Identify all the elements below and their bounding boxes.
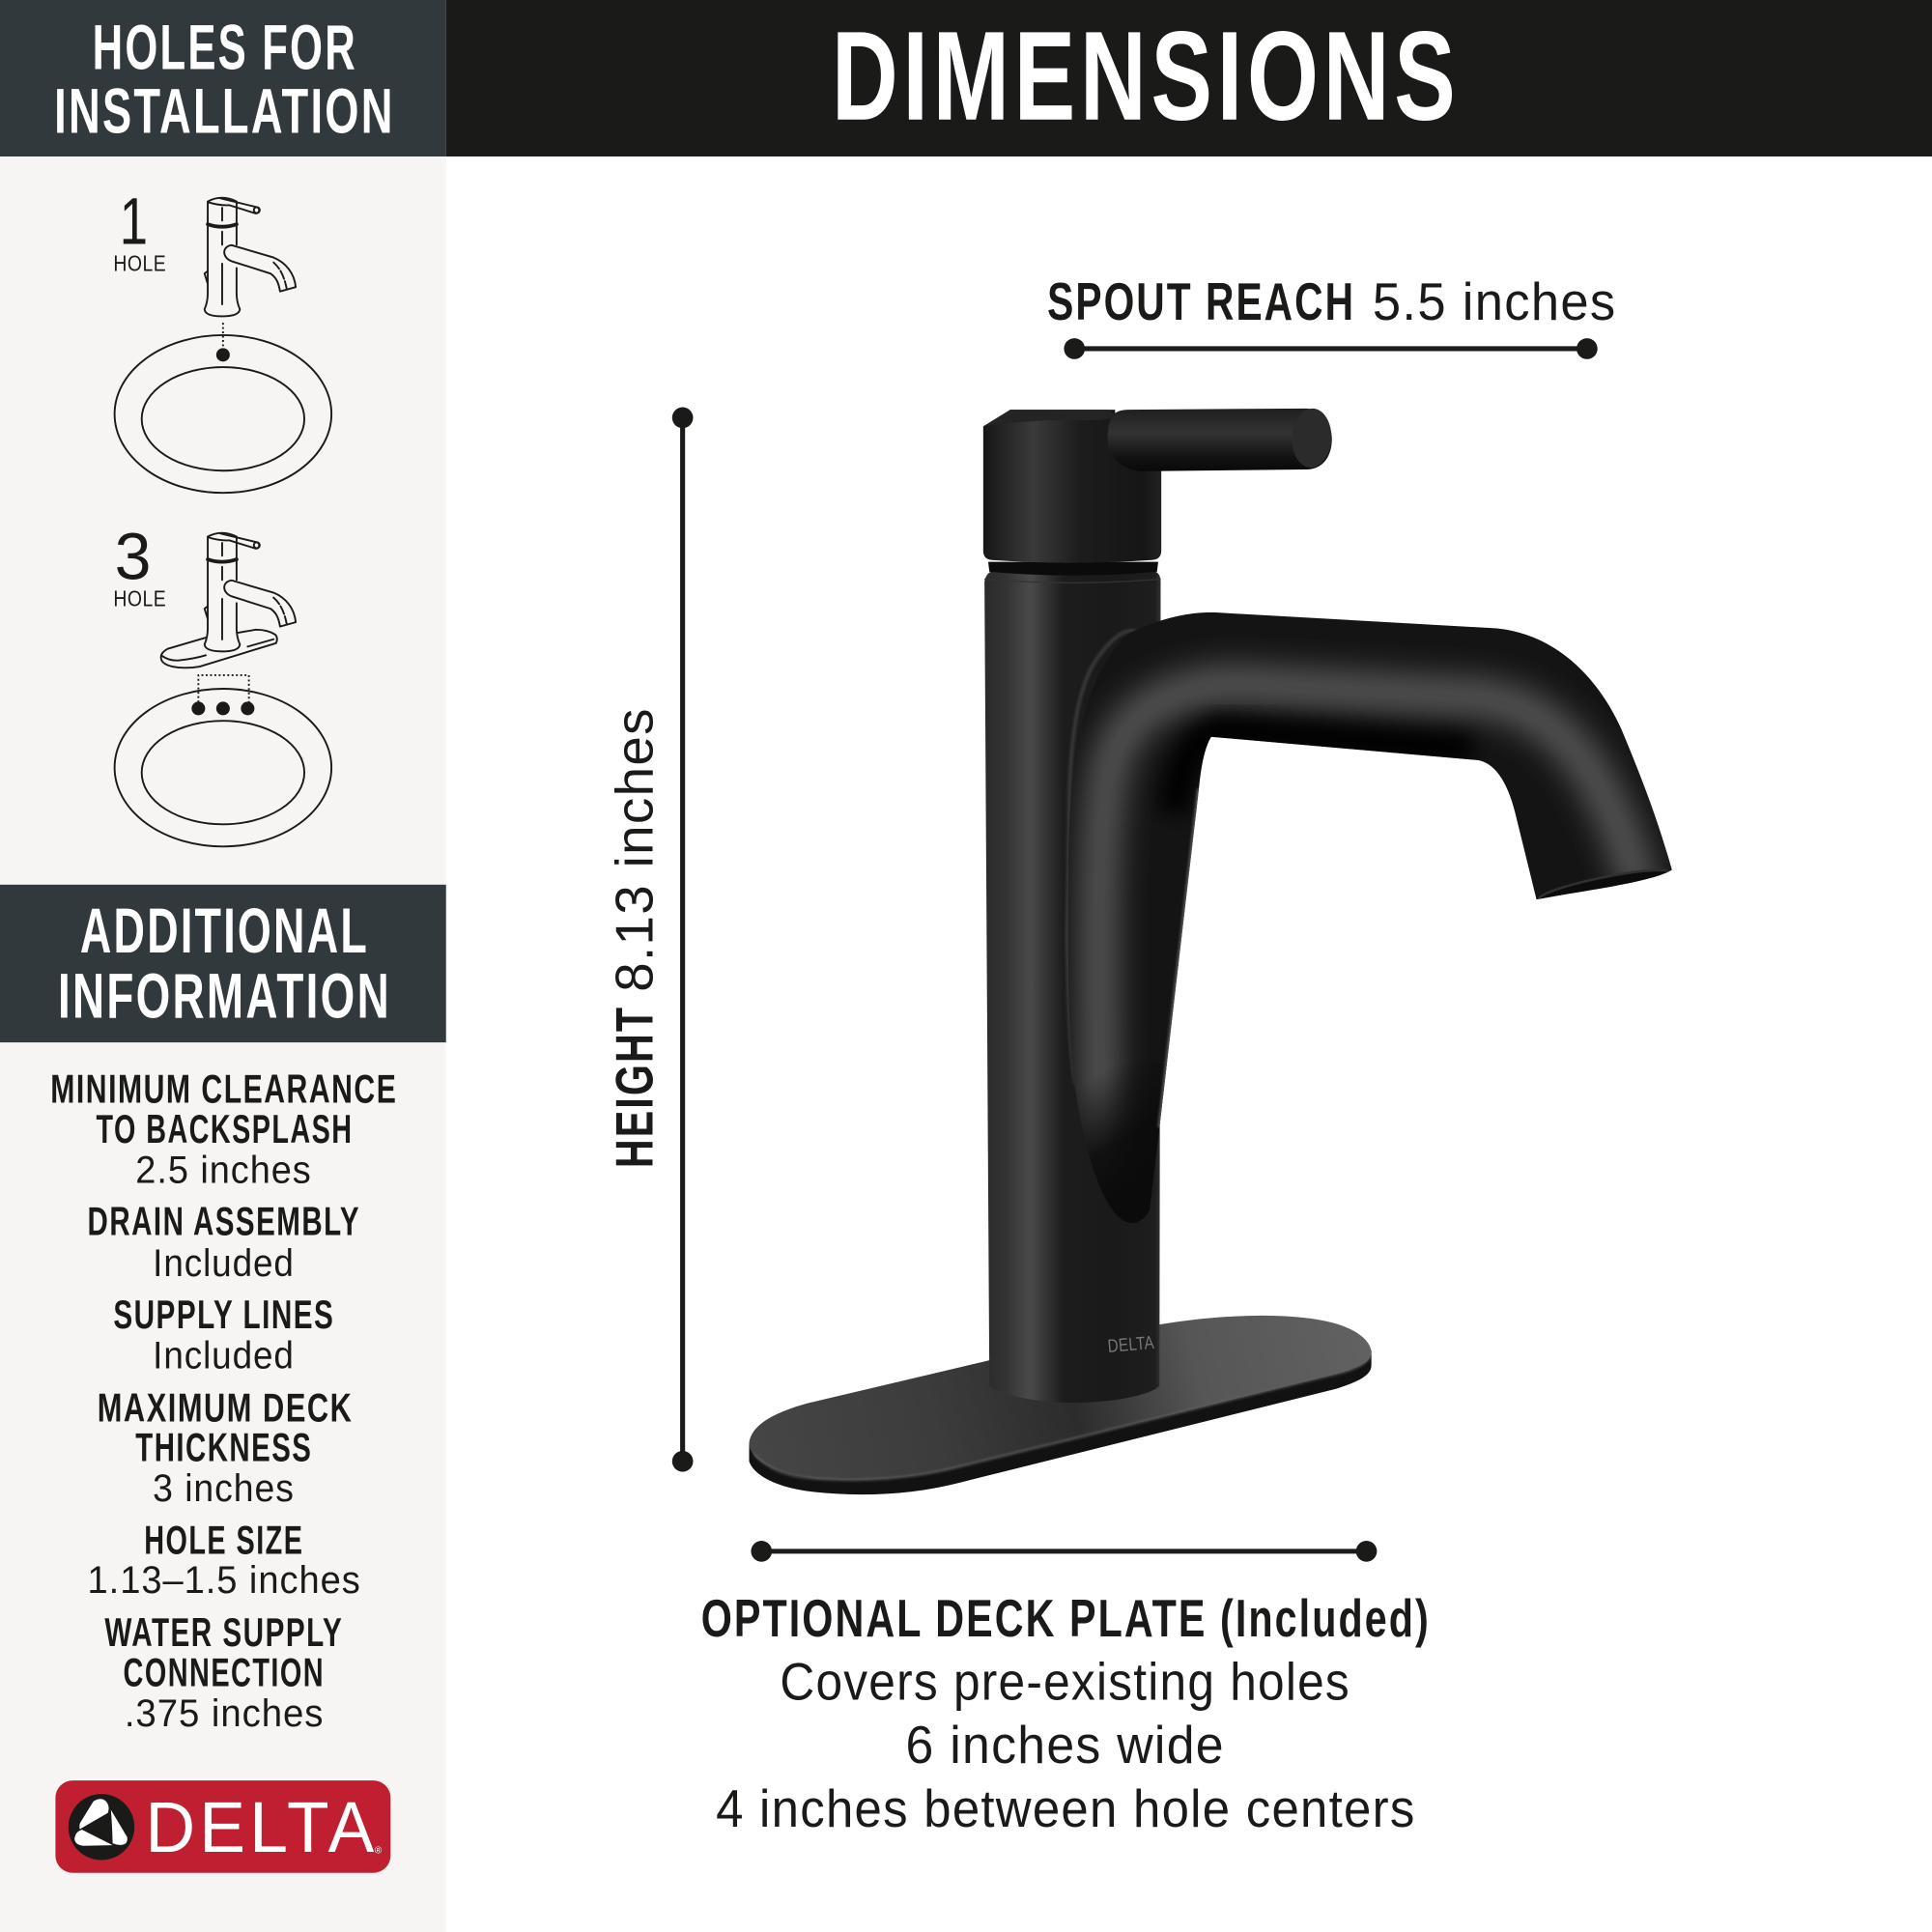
header: additional information: INFORMATION [58, 961, 391, 1033]
title: dimensions: DIMENSIONS [832, 5, 1460, 147]
text block: additional information list: MINIMUM CLEARANCE [50, 1066, 397, 1112]
dimension: spout reach: SPOUT REACH [1047, 271, 1355, 331]
dimension: height [604, 408, 693, 1472]
logo: delta: ® [375, 1845, 383, 1856]
handle lever [1108, 408, 1333, 471]
header: holes for installation: INSTALLATION [54, 76, 395, 148]
dimension: spout reach: 5.5 inches [1373, 271, 1616, 331]
text block: additional information list [50, 1066, 397, 1735]
text block: additional information list: WATER SUPPLY [104, 1609, 343, 1655]
text block: additional information list: SUPPLY LINES [113, 1292, 334, 1337]
dimension: height: HEIGHT [604, 1006, 664, 1168]
logo: delta: DELTA [146, 1787, 379, 1867]
text block: additional information list: THICKNESS [135, 1425, 312, 1470]
text block: optional deck plate: 6 inches wide [906, 1715, 1225, 1775]
text block: additional information list: 3 inches [153, 1467, 295, 1510]
panel: left sidebar background [0, 0, 446, 1932]
header: holes for installation: HOLES FOR [93, 12, 357, 83]
text block: additional information list: 1.13–1.5 inches [88, 1559, 361, 1602]
spout [1060, 604, 1688, 1233]
dimension: spout reach [1047, 271, 1616, 359]
header: holes for installation [0, 0, 446, 156]
dimension: height: 8.13 inches [604, 707, 664, 992]
title: dimensions [446, 0, 1932, 156]
text block: additional information list: TO BACKSPLASH [96, 1106, 353, 1151]
text block: additional information list: HOLE SIZE [144, 1517, 303, 1562]
ring [984, 562, 1161, 582]
text block: additional information list: 2.5 inches [135, 1149, 312, 1191]
header: additional information [0, 885, 446, 1042]
text block: additional information list: DRAIN ASSEMBLY [88, 1199, 360, 1244]
product: faucet [750, 408, 1688, 1494]
icon: 1 hole installation: 1 [120, 185, 149, 259]
dimension: deck plate width [751, 1541, 1377, 1562]
text block: additional information list: Included [153, 1242, 295, 1285]
text block: additional information list: .375 inches [125, 1692, 324, 1735]
icon: 3 hole installation: 3 [115, 519, 153, 593]
header: additional information: ADDITIONAL [80, 895, 369, 967]
handle body [983, 410, 1161, 563]
text block: optional deck plate: Covers pre-existing holes [780, 1652, 1350, 1712]
spout lip [1067, 631, 1142, 1084]
icon: 1 hole installation: HOLE [113, 251, 166, 276]
text block: optional deck plate [701, 1588, 1431, 1838]
icon: 3 hole installation [113, 519, 331, 846]
text block: optional deck plate: OPTIONAL DECK PLATE (Included) [701, 1588, 1431, 1648]
text block: additional information list: Included [153, 1334, 295, 1377]
text block: additional information list: CONNECTION [124, 1650, 325, 1695]
icon: 1 hole installation [113, 185, 331, 493]
icon: 3 hole installation: HOLE [113, 586, 166, 611]
stem [984, 572, 1161, 1403]
deck plate [750, 1316, 1372, 1494]
stamp: delta: DELTA [1107, 1333, 1155, 1357]
logo: delta [55, 1780, 390, 1873]
text block: additional information list: MAXIMUM DECK [98, 1384, 353, 1430]
text block: optional deck plate: 4 inches between hole centers [716, 1778, 1416, 1838]
